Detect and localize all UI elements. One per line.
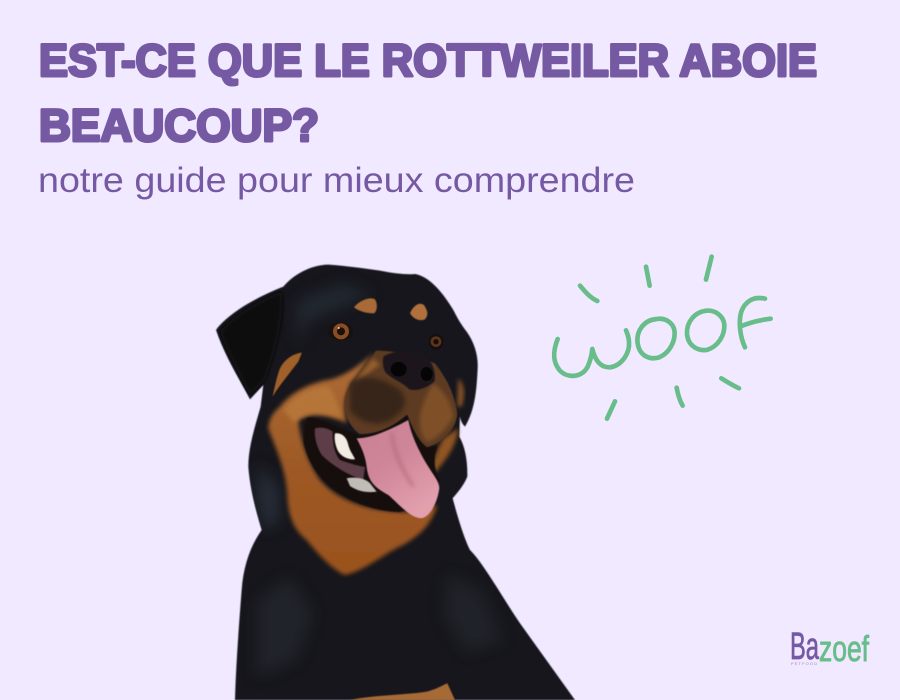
first O bbox=[637, 319, 675, 358]
letter W bbox=[554, 330, 629, 376]
title bbox=[39, 35, 817, 151]
title: BEAUCOUP? bbox=[39, 100, 319, 151]
nostrils bbox=[391, 362, 433, 381]
title: EST-CE QUE LE ROTTWEILER ABOIE bbox=[39, 35, 817, 86]
mouth interior bbox=[304, 415, 439, 512]
cheek tan light bbox=[283, 387, 342, 423]
bottom chest tan bbox=[350, 683, 455, 700]
muzzle bbox=[344, 351, 457, 447]
eyebrow spots bbox=[354, 298, 377, 313]
tongue bbox=[357, 420, 439, 518]
foam on lip bbox=[347, 478, 377, 492]
logo: Bazoef: Ba bbox=[790, 626, 820, 668]
second O bbox=[687, 311, 724, 350]
fur highlights clipped to the silhouette bbox=[220, 283, 503, 677]
letter F bbox=[740, 298, 771, 347]
nose bbox=[383, 351, 435, 390]
chest and jaw tan bbox=[268, 352, 437, 575]
logo: Bazoef: PETFOOD bbox=[791, 661, 817, 666]
dog body silhouette bbox=[216, 265, 575, 700]
illustration: rottweiler bbox=[216, 265, 575, 700]
tongue centre fold bbox=[392, 433, 413, 487]
muzzle tan rim bbox=[420, 383, 453, 442]
teeth bbox=[335, 433, 355, 459]
right eye bbox=[429, 333, 443, 350]
subtitle: notre guide pour mieux comprendre bbox=[38, 161, 635, 200]
left eye bbox=[328, 323, 353, 341]
logo: Bazoef: zoef bbox=[819, 628, 870, 669]
woof doodle bbox=[554, 257, 771, 419]
cheek mark left bbox=[273, 353, 302, 397]
muzzle dark patches bbox=[350, 378, 405, 423]
burst lines bbox=[580, 286, 597, 301]
logo: Bazoef bbox=[790, 626, 870, 669]
right jaw tan bbox=[432, 428, 458, 474]
gum bbox=[315, 428, 365, 480]
